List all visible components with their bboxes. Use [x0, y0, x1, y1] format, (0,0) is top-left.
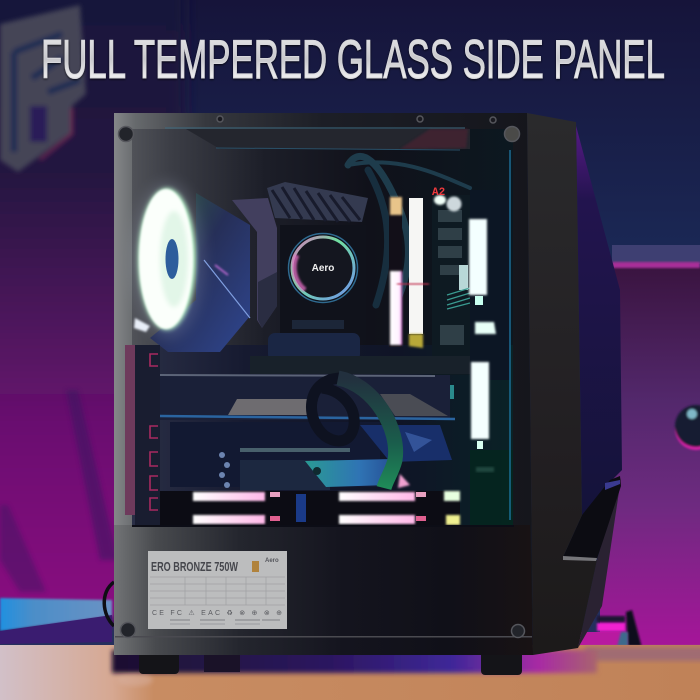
glowing RGB fan: [132, 182, 204, 338]
motherboard right components: [432, 187, 470, 375]
VRM heatsink left: [150, 193, 277, 352]
wall object: right sphere lamp: [675, 405, 700, 450]
PC case feet: [139, 650, 522, 675]
AIO pump block: [280, 225, 366, 340]
right side fans: [469, 150, 513, 525]
desk shelf left: [0, 598, 112, 644]
graphics card: [160, 375, 455, 420]
interior window: [125, 128, 513, 525]
PC case glass front panel: [114, 113, 533, 655]
left side pink mesh strip and cable grommets: [125, 345, 160, 525]
pump logo: Aero: [312, 263, 334, 274]
lower motherboard ports and slots: [170, 422, 452, 490]
wooden table: [0, 645, 700, 700]
debug LED: A2: [432, 187, 445, 199]
PSU label: Aero: [265, 558, 279, 564]
mid board circuitry: [250, 356, 470, 410]
coolant plate: [305, 459, 410, 488]
lower motherboard heatsink: [268, 320, 360, 361]
glass screws: [118, 116, 524, 638]
bottom PSU shroud with glowing RGB fans: [160, 491, 460, 525]
black cable left of case: [104, 582, 114, 626]
motherboard VRM heatsink top: [267, 182, 368, 222]
small cable stand right: [578, 610, 642, 648]
PSU label: [148, 551, 287, 629]
label heading: ERO BRONZE 750W: [151, 559, 239, 574]
ribbon cable loop: [311, 378, 396, 488]
RAM modules: [389, 197, 429, 348]
PC case right side panel: [527, 113, 622, 655]
water cooler tubes: [348, 156, 470, 305]
top vent mesh: [165, 128, 470, 150]
PSU label: CE FC ⚠ EAC ♻ ⊗ ⊕ ⊗ ⊕: [152, 609, 282, 617]
lower glass over PSU chamber: [114, 525, 533, 655]
background logo sign: [0, 5, 86, 172]
